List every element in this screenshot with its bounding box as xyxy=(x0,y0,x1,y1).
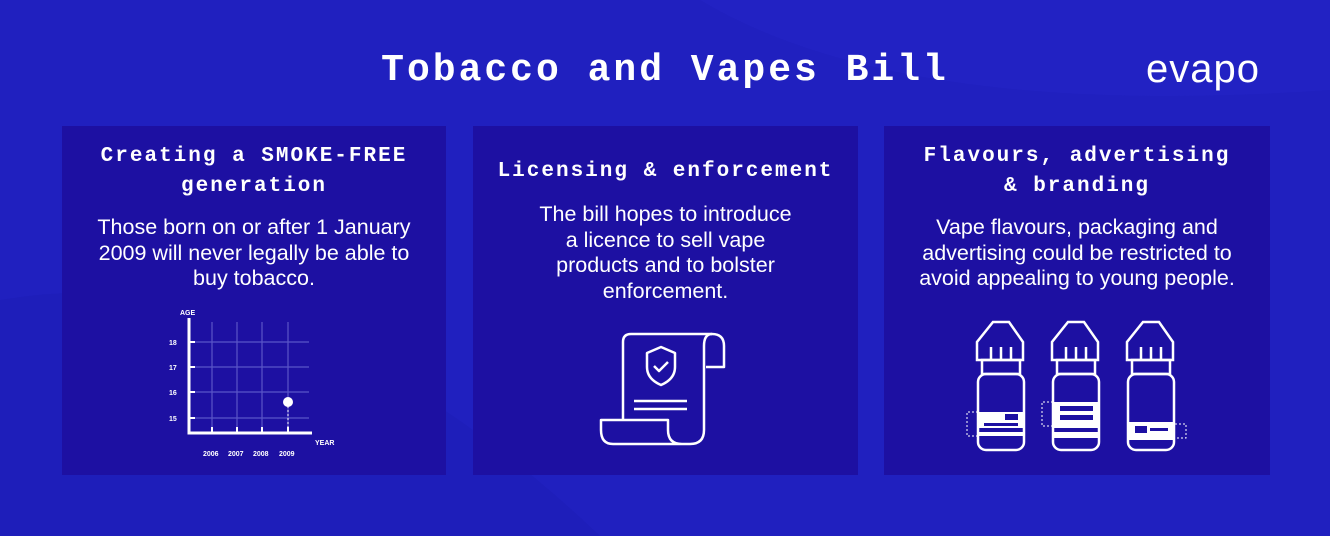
panel: licensing xyxy=(473,126,858,475)
chart: 2007 xyxy=(228,451,244,458)
heading: Creating a SMOKE-FREE xyxy=(101,145,407,168)
title: Tobacco and Vapes Bill xyxy=(381,49,949,92)
text: buy tobacco. xyxy=(193,266,315,290)
text xyxy=(539,202,792,302)
text: products and to bolster xyxy=(556,253,775,277)
text xyxy=(97,215,411,290)
chart: 16 xyxy=(169,390,177,397)
icon: scroll xyxy=(600,332,726,446)
text: advertising could be restricted to xyxy=(922,240,1232,264)
heading: Licensing & enforcement xyxy=(498,160,833,183)
heading xyxy=(101,145,407,198)
chart: 15 xyxy=(169,416,177,423)
panel: flavours xyxy=(884,126,1270,475)
heading: generation xyxy=(181,175,327,198)
text: avoid appealing to young people. xyxy=(919,266,1235,290)
heading: Flavours, advertising xyxy=(924,145,1230,168)
heading: & branding xyxy=(1004,175,1150,198)
text: 2009 will never legally be able to xyxy=(99,240,409,264)
text xyxy=(919,215,1235,290)
text: Those born on or after 1 January xyxy=(97,215,411,239)
text: a licence to sell vape xyxy=(566,228,765,252)
chart: 17 xyxy=(169,365,177,372)
text: enforcement. xyxy=(603,278,728,302)
chart: YEAR xyxy=(315,440,334,447)
text: The bill hopes to introduce xyxy=(539,202,792,226)
chart xyxy=(169,310,334,458)
chart: 2006 xyxy=(203,451,219,458)
panel: smoke-free generation xyxy=(62,126,446,475)
chart: AGE xyxy=(180,310,196,317)
chart: 18 xyxy=(169,340,177,347)
chart: 2009 xyxy=(279,451,295,458)
text: Vape flavours, packaging and xyxy=(936,215,1218,239)
logo: evapo xyxy=(1146,47,1260,91)
icon: bottles xyxy=(966,320,1186,452)
heading xyxy=(924,145,1230,198)
chart: 2008 xyxy=(253,451,269,458)
